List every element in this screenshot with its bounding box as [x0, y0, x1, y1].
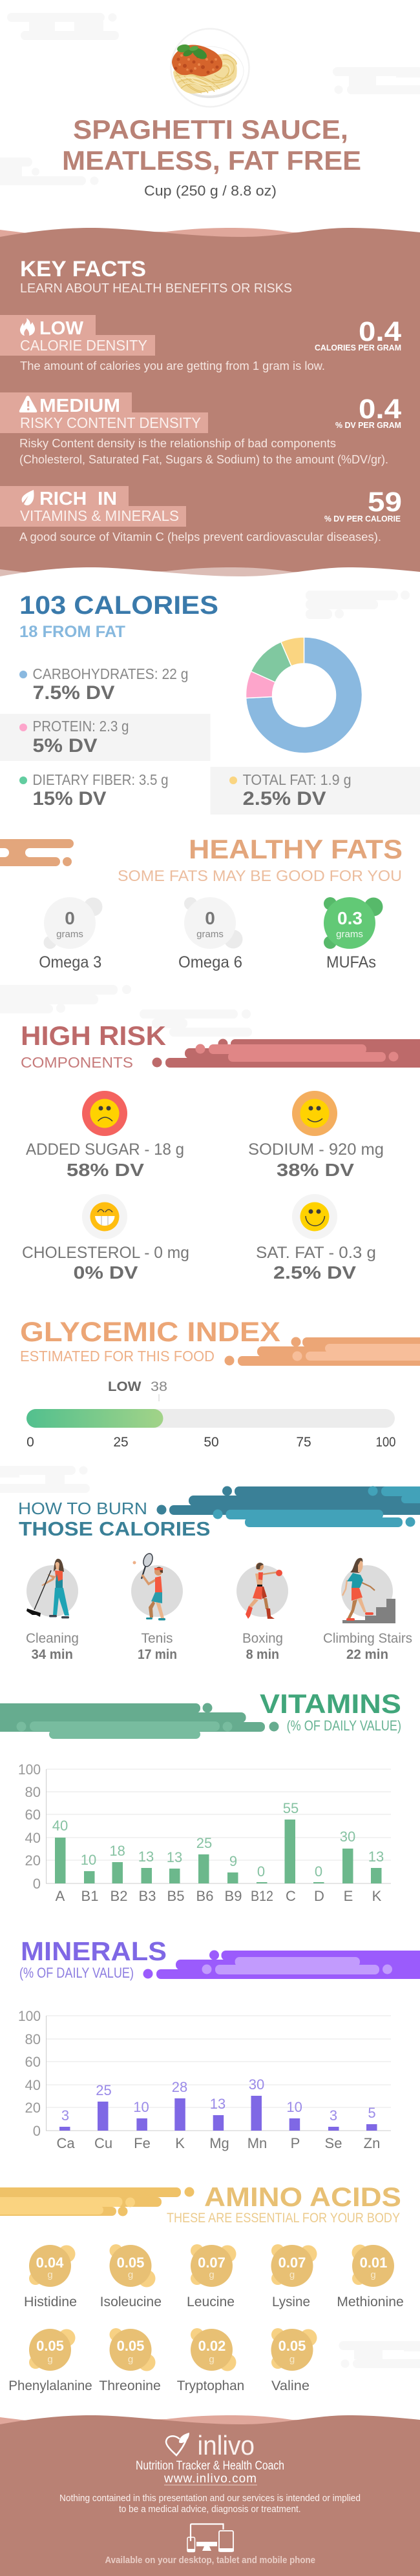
bar chart: minerals: 3 — [61, 2107, 69, 2124]
bar chart: vitamins: 0 — [315, 1863, 322, 1880]
bar chart: vitamins: 9 — [229, 1853, 237, 1869]
tagline: Nutrition Tracker & Health Coach — [136, 2459, 284, 2473]
amino: tryptophan: Tryptophan — [177, 2378, 244, 2393]
fact: medium risky content density: MEDIUM — [39, 396, 120, 416]
bar chart: vitamins: B6 — [196, 1888, 213, 1904]
subheading: ESTIMATED FOR THIS FOOD — [20, 1348, 215, 1364]
fact: medium risky content density: RISKY CONTENT DENSITY — [20, 414, 201, 431]
decorative stripes — [152, 1039, 420, 1068]
bar chart: vitamins: D — [314, 1888, 324, 1904]
subheading: SOME FATS MAY BE GOOD FOR YOU — [118, 867, 402, 885]
panel: vitamins — [0, 1689, 401, 1904]
donut chart — [246, 637, 362, 753]
decorative clouds — [0, 985, 252, 1037]
amino: lysine: 0.07 — [278, 2255, 306, 2271]
amino: methionine: 0.01 — [360, 2255, 387, 2271]
amino: tryptophan: g — [209, 2354, 215, 2365]
bar chart: minerals: 28 — [172, 2079, 187, 2095]
bar chart: minerals: P — [291, 2135, 300, 2151]
heading: how to burn: HOW TO BURN — [18, 1499, 147, 1518]
amino: phenylalanine: g — [47, 2354, 53, 2365]
heading: key facts — [20, 257, 292, 296]
fact: medium risky content density: 0.4 — [359, 394, 401, 425]
amino: tryptophan — [177, 2328, 244, 2393]
legend: protein — [0, 714, 211, 761]
bar chart: vitamins: 18 — [109, 1843, 125, 1859]
decorative clouds header — [0, 13, 420, 185]
risk: sodium — [248, 1091, 384, 1180]
amino: phenylalanine — [8, 2329, 92, 2393]
bar chart: minerals: 100 — [18, 2008, 41, 2024]
bar chart: minerals: 40 — [25, 2077, 41, 2093]
amino: leucine: g — [209, 2269, 215, 2280]
subheading: (% OF DAILY VALUE) — [19, 1965, 134, 1981]
bar chart: vitamins: B1 — [81, 1888, 98, 1904]
risk: added sugar: 58% DV — [67, 1160, 144, 1180]
risk: added sugar: ADDED SUGAR - 18 g — [26, 1141, 184, 1159]
hero: food image — [171, 28, 249, 107]
fact: rich in vitamins and minerals: % DV PER CALORIE — [324, 514, 401, 523]
stat: omega 6 — [178, 897, 243, 971]
amino: threonine: g — [128, 2354, 133, 2365]
amino: isoleucine: g — [128, 2269, 133, 2280]
fact: rich in vitamins and minerals: A good source of Vitamin C (helps prevent cardiovascular diseases). — [19, 531, 381, 543]
gauge label: LOW — [108, 1379, 142, 1394]
legend: carbohydrates: 7.5% DV — [32, 682, 115, 704]
amino: isoleucine — [100, 2244, 162, 2309]
bar chart: vitamins: K — [372, 1888, 382, 1904]
bar chart: vitamins: 30 — [340, 1829, 355, 1845]
stat: omega 6: Omega 6 — [178, 953, 242, 971]
amino: lysine: g — [289, 2269, 295, 2280]
logo: inlivo — [166, 2430, 255, 2460]
activity: tennis — [131, 1552, 183, 1662]
bar chart: minerals — [18, 2008, 391, 2151]
heading: high risk: HIGH RISK — [21, 1020, 166, 1051]
amino: histidine: g — [47, 2269, 53, 2280]
stat: mufas: 0.3 — [337, 908, 362, 928]
stat: omega 3: grams — [56, 929, 83, 940]
fact: low calorie density: CALORIE DENSITY — [20, 337, 147, 354]
bar chart: vitamins: B3 — [139, 1888, 156, 1904]
title — [62, 114, 361, 176]
decorative stripes — [0, 2187, 194, 2216]
activity: tennis: Tenis — [141, 1631, 173, 1646]
risk: cholesterol — [22, 1194, 189, 1283]
heading: key facts: KEY FACTS — [20, 257, 146, 281]
fact: low calorie density: The amount of calories you are getting from 1 gram is low. — [20, 360, 325, 372]
risk: cholesterol: 0% DV — [74, 1263, 138, 1283]
amino: methionine — [337, 2245, 404, 2309]
subheading: from fat: 18 FROM FAT — [19, 623, 125, 641]
bar chart: minerals: 30 — [249, 2076, 264, 2093]
disclaimer: to be a medical advice, diagnosis or treatment. — [119, 2504, 301, 2515]
availability note: Available on your desktop, tablet and mobile phone — [105, 2555, 315, 2566]
decorative stripes — [143, 1951, 420, 1979]
amino: valine: g — [289, 2354, 295, 2365]
legend: total fat: 2.5% DV — [243, 788, 326, 809]
gauge axis: 100 — [376, 1435, 395, 1450]
gauge label — [108, 1379, 167, 1401]
logo: inlivo: inlivo — [198, 2430, 255, 2460]
bar chart: vitamins: 20 — [25, 1852, 41, 1869]
decorative cloud — [306, 591, 410, 619]
legend: carbohydrates: CARBOHYDRATES: 22 g — [32, 665, 189, 682]
amino: threonine: Threonine — [99, 2378, 161, 2393]
stat: mufas: grams — [336, 929, 363, 940]
activity: boxing: 8 min — [246, 1647, 279, 1662]
decorative stripes — [225, 1337, 420, 1366]
amino: valine: 0.05 — [278, 2338, 306, 2354]
bar chart: minerals: Se — [325, 2135, 342, 2151]
bar chart: minerals: Fe — [134, 2135, 151, 2151]
bar chart: minerals: 3 — [330, 2107, 337, 2124]
fact: medium risky content density: Risky Content density is the relationship of bad components — [19, 437, 336, 450]
panel: key facts — [0, 228, 420, 581]
gauge axis: 75 — [296, 1435, 311, 1450]
panel: high risk components — [0, 985, 420, 1283]
stat: omega 3 — [39, 897, 102, 971]
icon: devices — [187, 2524, 234, 2552]
bar chart: minerals: 60 — [25, 2054, 41, 2070]
panel: glycemic index — [20, 1317, 420, 1450]
activity: cleaning: 34 min — [31, 1647, 73, 1662]
gauge axis: 0 — [26, 1435, 34, 1450]
glycemic gauge bar — [26, 1409, 395, 1428]
fact: rich in vitamins and minerals — [0, 486, 402, 543]
subheading: components: COMPONENTS — [21, 1054, 133, 1071]
fact: medium risky content density: (Cholesterol, Saturated Fat, Sugars & Sodium) to the amount (%DV/gr). — [19, 453, 388, 466]
decorative cloud — [339, 2341, 420, 2368]
bar chart: vitamins: 100 — [18, 1761, 41, 1778]
amino: valine — [271, 2328, 317, 2393]
title: MEATLESS, FAT FREE — [62, 145, 361, 176]
bar chart: minerals: 0 — [33, 2123, 41, 2139]
bar chart: minerals: Ca — [57, 2135, 75, 2151]
risk: sodium: 38% DV — [277, 1160, 354, 1180]
amino: leucine — [187, 2244, 236, 2309]
bar chart: vitamins: E — [344, 1888, 353, 1904]
amino: leucine: Leucine — [187, 2295, 235, 2309]
bar chart: vitamins: 0 — [33, 1876, 41, 1892]
activity: cleaning: Cleaning — [26, 1631, 79, 1646]
bar chart: minerals: K — [175, 2135, 185, 2151]
bar chart: vitamins: B5 — [167, 1888, 184, 1904]
heading: glycemic index: GLYCEMIC INDEX — [20, 1317, 280, 1348]
bar chart: minerals: 25 — [96, 2082, 112, 2098]
bar chart: vitamins: 55 — [283, 1800, 299, 1816]
activity: climbing stairs: Climbing Stairs — [323, 1631, 412, 1646]
legend: dietary fiber — [19, 771, 168, 809]
gauge axis — [26, 1435, 395, 1450]
decorative stripes — [156, 1486, 420, 1527]
amino: histidine — [24, 2245, 77, 2309]
amino: methionine: g — [370, 2269, 376, 2280]
decorative stripes — [0, 1703, 279, 1739]
title: SPAGHETTI SAUCE, — [73, 114, 348, 145]
heading: healthy fats: HEALTHY FATS — [189, 834, 403, 864]
disclaimer — [59, 2493, 361, 2515]
amino: methionine: Methionine — [337, 2295, 404, 2309]
stat: omega 6: grams — [196, 929, 224, 940]
bar chart: minerals: Mn — [247, 2135, 267, 2151]
risk: saturated fat: SAT. FAT - 0.3 g — [256, 1244, 376, 1262]
heading: calories: 103 CALORIES — [19, 591, 218, 620]
panel: healthy fats — [0, 834, 403, 971]
legend: protein: PROTEIN: 2.3 g — [32, 718, 129, 735]
stat: omega 3: Omega 3 — [39, 953, 101, 971]
legend: dietary fiber: DIETARY FIBER: 3.5 g — [32, 771, 168, 788]
bar chart: minerals: 80 — [25, 2031, 41, 2047]
risk: saturated fat — [256, 1194, 376, 1283]
heading: amino acids: AMINO ACIDS — [204, 2182, 401, 2212]
fact: rich in vitamins and minerals: VITAMINS & MINERALS — [20, 507, 179, 524]
amino: valine: Valine — [271, 2378, 310, 2393]
activity: cleaning — [26, 1559, 79, 1662]
amino: isoleucine: Isoleucine — [100, 2295, 162, 2309]
fact: rich in vitamins and minerals: RICH IN — [39, 489, 117, 509]
risk: saturated fat: 2.5% DV — [273, 1263, 356, 1283]
bar chart: vitamins: 13 — [138, 1849, 154, 1865]
heading: those calories: THOSE CALORIES — [19, 1517, 211, 1540]
bar chart: vitamins: 60 — [25, 1807, 41, 1823]
panel: how to burn calories — [0, 1466, 420, 1662]
amino: isoleucine: 0.05 — [117, 2255, 144, 2271]
bar chart: vitamins: 80 — [25, 1784, 41, 1800]
risk: sodium: SODIUM - 920 mg — [248, 1141, 384, 1159]
panel: footer — [0, 2415, 420, 2576]
amino: phenylalanine: 0.05 — [36, 2338, 64, 2354]
legend: total fat — [211, 767, 420, 815]
legend: total fat: TOTAL FAT: 1.9 g — [243, 771, 352, 788]
activity: boxing: Boxing — [242, 1631, 283, 1646]
gauge label: 38 — [151, 1379, 167, 1394]
legend: dietary fiber: 15% DV — [32, 788, 106, 809]
bar chart: minerals: 10 — [286, 2099, 302, 2115]
amino: lysine: Lysine — [272, 2295, 310, 2309]
bar chart: minerals: 10 — [133, 2099, 149, 2115]
fact: low calorie density: CALORIES PER GRAM — [315, 343, 401, 352]
heading: key facts: LEARN ABOUT HEALTH BENEFITS OR RISKS — [20, 281, 292, 296]
fact: medium risky content density: % DV PER GRAM — [335, 420, 401, 430]
bar chart: vitamins: B12 — [251, 1888, 273, 1904]
heading: vitamins: VITAMINS — [260, 1689, 401, 1719]
fact: low calorie density — [0, 315, 401, 372]
amino: histidine: 0.04 — [36, 2255, 64, 2271]
activity: tennis: 17 min — [138, 1647, 177, 1662]
bar chart: vitamins: 10 — [81, 1852, 96, 1868]
stat: omega 3: 0 — [65, 908, 75, 928]
decorative cloud — [0, 1466, 90, 1493]
activity: climbing stairs: 22 min — [346, 1647, 388, 1662]
amino: leucine: 0.07 — [198, 2255, 226, 2271]
disclaimer: Nothing contained in this presentation and our services is intended or implied — [59, 2493, 361, 2504]
amino: phenylalanine: Phenylalanine — [8, 2378, 92, 2393]
website link: www.inlivo.com — [163, 2472, 257, 2486]
decorative header stripes — [0, 839, 74, 866]
bar chart: vitamins: B2 — [110, 1888, 127, 1904]
bar chart: minerals: Cu — [94, 2135, 112, 2151]
bar chart: vitamins: C — [286, 1888, 296, 1904]
stat: mufas — [324, 897, 383, 971]
bar chart: minerals: 5 — [368, 2105, 376, 2121]
bar chart: vitamins: A — [56, 1888, 65, 1904]
fact: low calorie density: LOW — [39, 318, 84, 339]
bar chart: vitamins: 13 — [167, 1849, 182, 1865]
bar chart: minerals: Mg — [209, 2135, 229, 2151]
activity: boxing — [236, 1563, 288, 1662]
legend: carbohydrates — [19, 665, 189, 704]
bar chart: minerals: Zn — [364, 2135, 380, 2151]
panel: amino acids — [0, 2182, 420, 2393]
risk: added sugar — [26, 1091, 184, 1180]
bar chart: vitamins — [18, 1761, 391, 1904]
amino: tryptophan: 0.02 — [198, 2338, 226, 2354]
panel: calories — [0, 591, 420, 815]
fact: rich in vitamins and minerals: 59 — [368, 487, 402, 518]
activity: climbing stairs — [323, 1558, 412, 1662]
serving size: Cup (250 g / 8.8 oz) — [144, 183, 277, 199]
gauge axis: 50 — [204, 1435, 219, 1450]
fact: medium risky content density — [0, 392, 401, 466]
amino: threonine — [99, 2328, 161, 2393]
bar chart: vitamins: 40 — [52, 1818, 68, 1834]
bar chart: minerals: 20 — [25, 2100, 41, 2116]
legend: protein: 5% DV — [32, 735, 97, 756]
stat: mufas: MUFAs — [326, 953, 376, 971]
amino: histidine: Histidine — [24, 2295, 77, 2309]
fact: low calorie density: 0.4 — [359, 316, 401, 347]
heading: minerals: MINERALS — [21, 1936, 167, 1966]
bar chart: vitamins: 40 — [25, 1830, 41, 1846]
amino: threonine: 0.05 — [117, 2338, 144, 2354]
risk: cholesterol: CHOLESTEROL - 0 mg — [22, 1244, 189, 1262]
bar chart: vitamins: 13 — [368, 1849, 384, 1865]
panel: minerals — [18, 1936, 420, 2151]
bar chart: vitamins: 0 — [257, 1863, 265, 1880]
gauge axis: 25 — [113, 1435, 129, 1450]
stat: omega 6: 0 — [205, 908, 215, 928]
decorative dot — [63, 857, 72, 866]
bar chart: vitamins: 25 — [196, 1835, 212, 1851]
bar chart: vitamins: B9 — [225, 1888, 242, 1904]
bar chart: minerals: 13 — [210, 2096, 226, 2112]
amino: lysine — [271, 2244, 317, 2309]
